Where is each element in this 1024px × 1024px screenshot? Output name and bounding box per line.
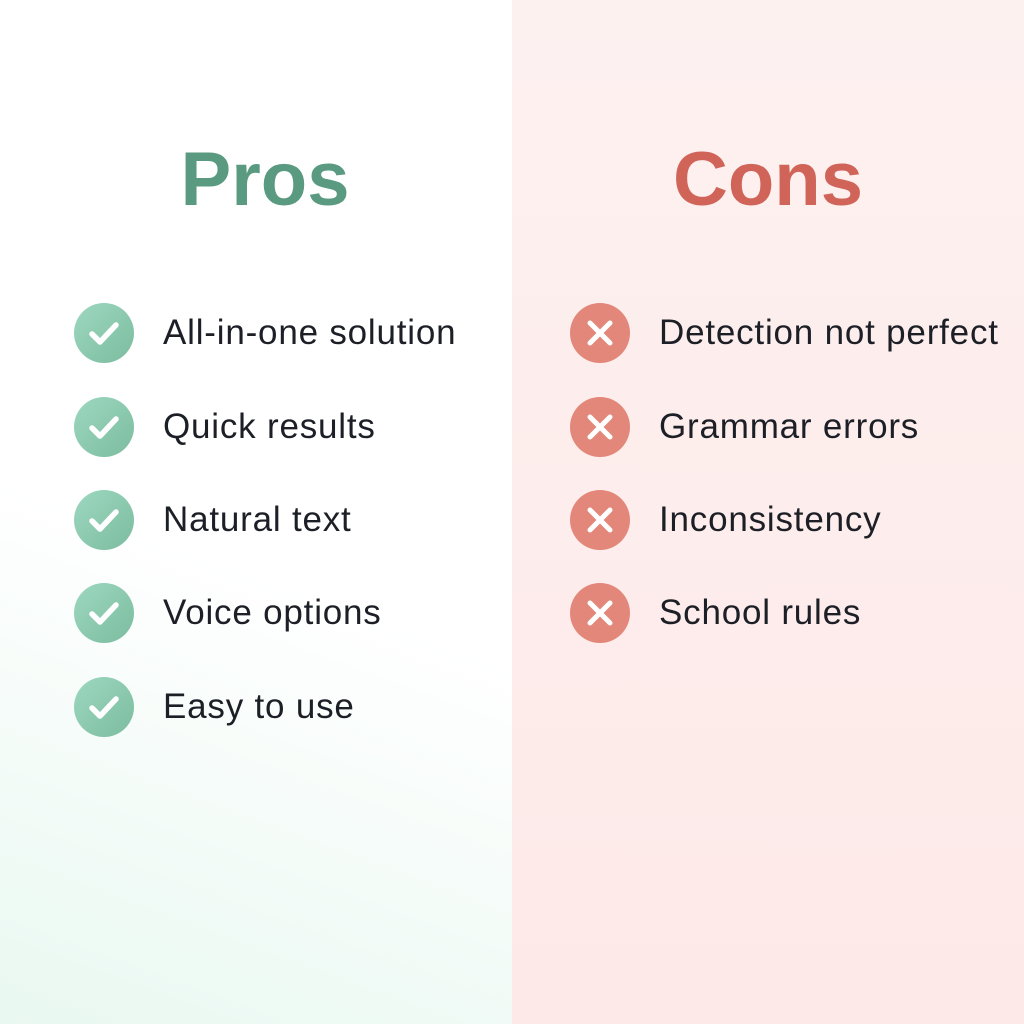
item: natural: Natural text	[163, 500, 352, 539]
panel: pros	[0, 0, 512, 1024]
item: voice	[74, 583, 382, 643]
title: cons: Cons	[673, 137, 863, 222]
item: inconsistency	[570, 490, 881, 550]
item: detection	[570, 303, 999, 363]
item: easy: Easy to use	[163, 687, 355, 726]
item: all-in-one	[74, 303, 456, 363]
item: all-in-one: All-in-one solution	[163, 313, 456, 352]
item: grammar	[570, 397, 919, 457]
panel: cons	[512, 0, 1024, 1024]
item: natural	[74, 490, 352, 550]
title: pros: Pros	[181, 137, 349, 222]
item: school	[570, 583, 861, 643]
item: quick: Quick results	[163, 407, 376, 446]
item: inconsistency: Inconsistency	[659, 500, 881, 539]
item: school: School rules	[659, 593, 861, 632]
item: quick	[74, 397, 376, 457]
item: voice: Voice options	[163, 593, 382, 632]
item: grammar: Grammar errors	[659, 407, 919, 446]
item: easy	[74, 677, 355, 737]
item: detection: Detection not perfect	[659, 313, 999, 352]
